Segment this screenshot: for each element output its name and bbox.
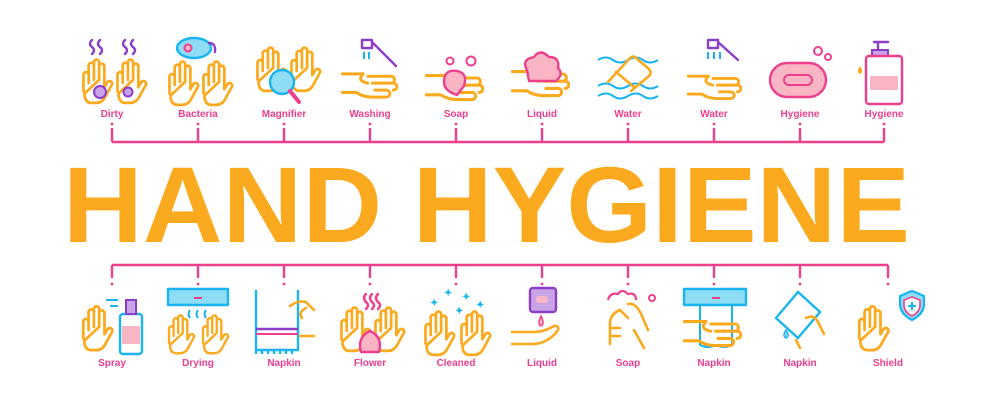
bottom labels: Drying — [182, 358, 214, 369]
bottom labels: Flower — [354, 358, 386, 369]
top labels — [101, 109, 904, 120]
bottom labels — [98, 358, 903, 369]
icon: napkin roll — [256, 290, 314, 354]
title: HAND HYGIENE — [63, 144, 910, 265]
bottom labels: Soap — [616, 358, 640, 369]
icon: dirty — [83, 40, 146, 103]
icon: shield — [859, 291, 924, 350]
top labels: Water — [700, 109, 728, 120]
icon: cleaned: ✦ — [476, 300, 484, 311]
icon: soap bar — [770, 47, 831, 97]
top labels: Bacteria — [178, 109, 218, 120]
icon: soap hands — [608, 291, 655, 348]
icon: cleaned: ✦ — [430, 298, 438, 309]
top labels: Dirty — [101, 109, 124, 120]
bottom labels: Napkin — [783, 358, 817, 369]
top labels: Washing — [349, 109, 391, 120]
icon: washing — [342, 40, 397, 97]
icon: flower — [341, 294, 404, 352]
icon: napkin wipe — [776, 292, 824, 348]
icon: water tap — [688, 40, 741, 99]
bottom labels: Napkin — [267, 358, 301, 369]
bottom labels: Liquid — [527, 358, 557, 369]
icon: spray — [83, 300, 142, 354]
top labels: Water — [614, 109, 642, 120]
bottom labels: Cleaned — [437, 358, 475, 369]
icon: soap — [426, 56, 483, 100]
top connector lines — [112, 128, 888, 278]
icon: liquid — [512, 52, 569, 96]
icon: napkin dryer — [684, 289, 746, 347]
top labels: Soap — [444, 109, 468, 120]
icon: dispenser — [858, 42, 902, 104]
top labels: Hygiene — [781, 109, 820, 120]
icon: bacteria — [169, 38, 232, 105]
bottom labels: Napkin — [697, 358, 731, 369]
icon: cleaned — [425, 288, 490, 355]
bottom labels: Shield — [873, 358, 903, 369]
icon: drying — [168, 289, 228, 353]
top labels: Hygiene — [865, 109, 904, 120]
icon: magnifier — [257, 48, 320, 102]
bottom labels: Spray — [98, 358, 126, 369]
icon: liquid dispenser — [512, 288, 558, 344]
icon: water — [598, 56, 658, 98]
icon: cleaned: ✦ — [462, 292, 470, 303]
top labels: Magnifier — [262, 109, 306, 120]
top labels: Liquid — [527, 109, 557, 120]
icon: cleaned: ✦ — [455, 306, 463, 317]
icon: cleaned: ✦ — [444, 288, 452, 299]
